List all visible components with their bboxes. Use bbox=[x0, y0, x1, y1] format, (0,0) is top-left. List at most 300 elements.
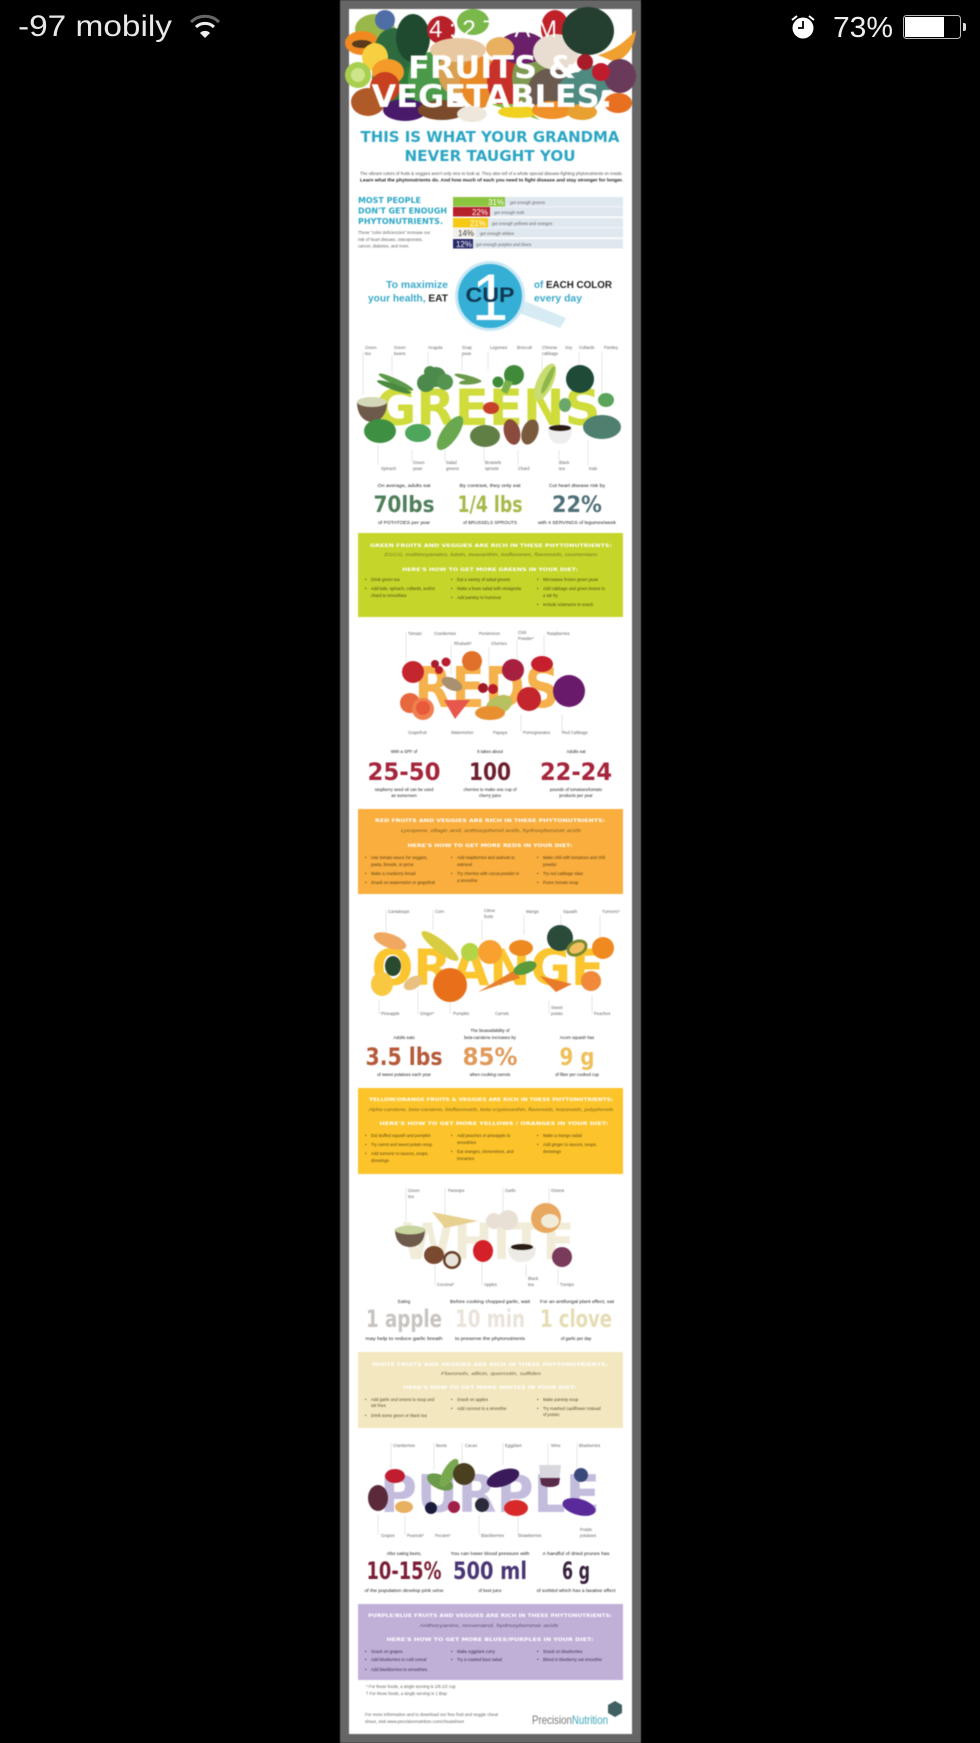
panel: orange illustration: Citrus bbox=[484, 908, 495, 913]
panel: purple tips: Snack on grapes bbox=[371, 1649, 402, 1654]
panel: greens illustration: peas bbox=[413, 466, 422, 471]
stats: purple: of sorbitol which has a laxative effect bbox=[536, 1588, 616, 1593]
stats: white: 1 apple bbox=[366, 1305, 442, 1333]
panel: reds tips: • bbox=[451, 855, 453, 860]
panel: reds tips: Make a cranberry bread bbox=[371, 871, 416, 876]
panel: white tips: of potato bbox=[543, 1412, 560, 1417]
panel: reds illustration: Cranberries bbox=[434, 631, 456, 636]
panel: white illustration: Turnips bbox=[560, 1282, 574, 1287]
panel: greens illustration: Black bbox=[559, 460, 570, 465]
stats: orange bbox=[366, 1028, 599, 1077]
panel: purple tips bbox=[358, 1604, 623, 1680]
stats: orange: when cooking carrots bbox=[470, 1072, 510, 1077]
panel: reds tips: Try red cabbage slaw bbox=[543, 871, 584, 876]
bar chart: color intake: get enough purples and blues bbox=[476, 242, 531, 247]
word: orange: ORANGE bbox=[372, 939, 604, 997]
bar chart: color intake: get enough whites bbox=[480, 231, 514, 236]
panel: orange tips: Eat stuffed squash and pumpkin bbox=[371, 1133, 431, 1138]
stats: purple: 6 g bbox=[562, 1557, 590, 1585]
panel: orange tips: Add ginger to sauces, soups, bbox=[543, 1142, 597, 1147]
stats: white: may help to reduce garlic breath bbox=[366, 1336, 443, 1341]
panel: white tips: • bbox=[365, 1413, 367, 1418]
word: greens: GREENS bbox=[376, 379, 600, 437]
panel: purple tips: • bbox=[365, 1649, 367, 1654]
panel: reds tips: • bbox=[365, 871, 367, 876]
icon: battery bbox=[904, 16, 966, 38]
panel: purple illustration: potatoes bbox=[580, 1533, 596, 1538]
panel: orange tips: • bbox=[537, 1133, 539, 1138]
panel: reds tips: Add raspberries and walnuts to bbox=[457, 855, 515, 860]
panel: purple illustration bbox=[368, 1443, 600, 1538]
panel: greens tips: Drink green tea bbox=[371, 577, 400, 582]
panel: white illustration: Green bbox=[408, 1188, 420, 1193]
stats: reds: It takes about bbox=[477, 749, 504, 754]
panel: orange illustration bbox=[371, 908, 620, 1016]
panel: reds illustration: Powder* bbox=[518, 636, 534, 641]
stats: reds: pounds of tomatoes/tomato bbox=[550, 787, 603, 792]
panel: purple tips: Add blackberries to smoothies bbox=[371, 1667, 427, 1672]
icon: alarm clock bbox=[792, 16, 814, 38]
panel: reds tips: • bbox=[537, 855, 539, 860]
panel: white tips: • bbox=[451, 1397, 453, 1402]
stats: white: to preserve the phytonutrients bbox=[455, 1336, 525, 1341]
panel: most people heading bbox=[358, 196, 447, 248]
intro text bbox=[360, 171, 623, 182]
panel: greens illustration: Spinach bbox=[381, 466, 397, 471]
panel: greens tips bbox=[358, 533, 623, 617]
panel: greens illustration: sprouts bbox=[485, 466, 499, 471]
panel: greens illustration: greens bbox=[446, 466, 459, 471]
panel: orange tips: • bbox=[365, 1151, 367, 1156]
stats: greens: with 4 SERVINGS of legumes/week bbox=[538, 520, 617, 525]
panel: white illustration: Parsnips bbox=[448, 1188, 464, 1193]
panel: greens illustration: tea bbox=[365, 351, 371, 356]
panel: orange illustration: Sweet bbox=[551, 1005, 563, 1010]
panel: white tips: Drink some green or black tea bbox=[371, 1413, 428, 1418]
panel: reds tips: Lycopene, ellagic acid, anthoxyphenol acids, hydroxybenzoic acids bbox=[401, 828, 582, 833]
stats: orange: The bioavailability of bbox=[471, 1028, 510, 1033]
panel: reds illustration: Papaya bbox=[493, 730, 508, 735]
intro text: The vibrant colors of fruits & veggies aren't only nice to look at. They also tell of a whole special disease-fighting phytonutrients on inside. bbox=[360, 171, 623, 176]
bar chart: color intake: 14% bbox=[458, 229, 474, 238]
panel: orange illustration: Turmeric* bbox=[602, 909, 620, 914]
stats: reds: 22-24 bbox=[540, 758, 612, 786]
panel: white tips: • bbox=[537, 1406, 539, 1411]
panel: greens tips: • bbox=[451, 595, 453, 600]
panel: orange illustration: Cantaloupe bbox=[388, 909, 410, 914]
panel: greens tips: a stir fry bbox=[543, 593, 559, 598]
logo: Precision Nutrition: PrecisionNutrition bbox=[532, 1713, 608, 1727]
status bar bbox=[18, 10, 966, 44]
callout: 1 cup per day: To maximize bbox=[386, 279, 448, 291]
panel: reds tips: • bbox=[365, 880, 367, 885]
panel: greens tips: HERE'S HOW TO GET MORE GREENS IN YOUR DIET: bbox=[402, 567, 578, 573]
panel: purple illustration: Wine bbox=[551, 1443, 561, 1448]
panel: white illustration: tea bbox=[408, 1194, 414, 1199]
stats: purple bbox=[364, 1551, 616, 1593]
title bbox=[372, 50, 612, 115]
stats: greens: of BRUSSELS SPROUTS bbox=[463, 520, 517, 525]
panel: orange illustration: Squash bbox=[563, 909, 578, 914]
stats: reds: raspberry seed oil can be used bbox=[375, 787, 434, 792]
panel: purple tips: • bbox=[451, 1649, 453, 1654]
intro text: Learn what the phytonutrients do. And how much of each you need to fight disease and stay stronger for longer. bbox=[360, 178, 623, 182]
logo: Precision Nutrition bbox=[532, 1701, 622, 1727]
panel: purple tips: • bbox=[537, 1657, 539, 1662]
panel: greens illustration: Collards bbox=[579, 345, 594, 350]
panel: orange tips: • bbox=[365, 1142, 367, 1147]
bar chart: color intake bbox=[453, 197, 623, 249]
panel: white illustration bbox=[395, 1188, 574, 1287]
produce shapes bbox=[368, 1456, 597, 1519]
stats: orange: beta-carotene increases by bbox=[464, 1035, 517, 1040]
panel: greens illustration: Broccoli bbox=[517, 345, 532, 350]
panel: greens illustration: Snap bbox=[462, 345, 472, 350]
panel: orange illustration: fruits bbox=[484, 914, 493, 919]
panel: reds illustration: Watermelon bbox=[451, 730, 474, 735]
bar chart: color intake: 31% bbox=[488, 198, 504, 207]
header collage of fruits and vegetables bbox=[345, 7, 636, 122]
panel: purple tips: • bbox=[537, 1649, 539, 1654]
panel: orange tips: • bbox=[365, 1133, 367, 1138]
stats: reds: With a SPF of bbox=[391, 749, 418, 754]
bar chart: color intake: get enough greens bbox=[510, 200, 545, 205]
stats: reds: 25-50 bbox=[368, 758, 440, 786]
panel: white illustration: Coconut* bbox=[437, 1282, 455, 1287]
panel: orange illustration: Ginger* bbox=[420, 1011, 435, 1016]
panel: white tips: • bbox=[451, 1406, 453, 1411]
panel: greens tips: • bbox=[537, 586, 539, 591]
footnotes: † For these foods, a single serving is 1 tbsp bbox=[366, 1691, 447, 1696]
stats: reds: cherries to make one cup of bbox=[463, 787, 517, 792]
panel: purple tips: Try a roasted beet salad bbox=[457, 1657, 503, 1662]
stats: orange: 3.5 lbs bbox=[366, 1043, 442, 1071]
stats: reds: 100 bbox=[469, 758, 511, 786]
panel: greens illustration: Green bbox=[394, 345, 406, 350]
stats: reds: as sunscreen bbox=[391, 793, 417, 798]
panel: purple tips: • bbox=[451, 1657, 453, 1662]
panel: purple illustration: Blackberries bbox=[481, 1533, 504, 1538]
panel: reds illustration: Persimmon bbox=[479, 631, 501, 636]
panel: purple tips: Add blueberries to cold cereal bbox=[371, 1657, 426, 1662]
panel: orange tips: Add turmeric to sauces, soups, bbox=[371, 1151, 428, 1156]
panel: reds illustration bbox=[400, 630, 589, 735]
word: purple: PURPLE bbox=[380, 1465, 600, 1525]
panel: orange tips: Try carrot and sweet potato soup bbox=[371, 1142, 433, 1147]
stats: white: 1 clove bbox=[540, 1305, 612, 1333]
panel: white tips: Snack on apples bbox=[457, 1397, 488, 1402]
panel: reds illustration: Raspberries bbox=[547, 631, 570, 636]
panel: greens illustration: tea bbox=[559, 466, 565, 471]
panel: white illustration: Garlic bbox=[505, 1188, 516, 1193]
panel: orange tips: YELLOW/ORANGE FRUITS & VEGGIES ARE RICH IN THESE PHYTONUTRIENTS: bbox=[368, 1097, 613, 1103]
panel: orange tips: Alpha-carotene, beta-carotene, bioflavonoids, beta-cryptoxanthin, flavonoids, terpenoids, polyphenols bbox=[367, 1107, 614, 1112]
stats: purple: of beet juice bbox=[478, 1588, 502, 1593]
stats: reds: Adults eat bbox=[566, 749, 586, 754]
panel: reds tips: powder bbox=[543, 862, 557, 867]
panel: reds tips: • bbox=[451, 871, 453, 876]
panel: white illustration: Apples bbox=[484, 1282, 497, 1287]
stats: purple: A handful of dried prunes has bbox=[542, 1551, 610, 1556]
panel: orange tips: Add peaches or pineapple to bbox=[457, 1133, 511, 1138]
panel: reds illustration: Cherries bbox=[491, 641, 507, 646]
stats: greens: 1/4 lbs bbox=[458, 493, 522, 518]
word: white: WHITE bbox=[402, 1213, 574, 1271]
callout: 1 cup per day: your health, EAT bbox=[368, 292, 449, 304]
panel: reds tips: Try cherries with cocoa powder in bbox=[457, 871, 520, 876]
panel: purple illustration: Eggplant bbox=[505, 1443, 522, 1448]
icon: measuring cup bbox=[455, 260, 566, 334]
panel: reds tips: • bbox=[537, 871, 539, 876]
panel: orange tips: Make a mango salad bbox=[543, 1133, 583, 1138]
panel: orange illustration: Mango bbox=[526, 909, 539, 914]
carrier text: -97 mobily bbox=[18, 10, 172, 43]
subtitle bbox=[360, 128, 620, 165]
produce shapes bbox=[395, 1203, 572, 1269]
panel: most people heading: These "color deficiencies" increase our bbox=[358, 230, 431, 235]
panel: greens illustration: Arugula bbox=[428, 345, 443, 350]
stats: greens: 70lbs bbox=[374, 493, 434, 518]
panel: white tips: WHITE FRUITS AND VEGGIES ARE RICH IN THESE PHYTONUTRIENTS: bbox=[372, 1362, 608, 1368]
stats: white bbox=[366, 1299, 615, 1341]
panel: greens tips: • bbox=[537, 577, 539, 582]
panel: greens tips: EGCG, isothiocyanates, lutein, zeaxanthin, isoflavones, flavonoids, coumestans bbox=[384, 552, 598, 557]
panel: purple tips: Anthocyanins, resveratrol, hydroxybenzoic acids bbox=[418, 1623, 559, 1628]
stats: purple: You can lower blood pressure with bbox=[450, 1551, 530, 1556]
subtitle: THIS IS WHAT YOUR GRANDMA bbox=[360, 128, 620, 146]
panel: white tips: HERE'S HOW TO GET MORE WHITES IN YOUR DIET: bbox=[404, 1385, 577, 1391]
stats: greens: 22% bbox=[552, 493, 602, 518]
panel: white tips: Try mashed cauliflower instead bbox=[543, 1406, 601, 1411]
panel: orange tips: dressings bbox=[371, 1158, 389, 1163]
panel: greens tips: • bbox=[451, 586, 453, 591]
bar chart: color intake: get enough reds bbox=[494, 210, 524, 215]
panel: orange illustration: Pumpkin bbox=[453, 1011, 470, 1016]
panel: greens tips: Add cabbage and green beans to bbox=[543, 586, 606, 591]
battery percent: 73% bbox=[833, 12, 893, 44]
panel: reds tips: HERE'S HOW TO GET MORE REDS IN YOUR DIET: bbox=[408, 843, 573, 849]
panel: greens illustration: Salad bbox=[446, 460, 457, 465]
panel: greens tips: Eat a variety of salad greens bbox=[457, 577, 510, 582]
panel: reds illustration: Pomegranates bbox=[523, 730, 550, 735]
panel: reds tips: pasta, breads, or pizza bbox=[371, 862, 414, 867]
panel: greens tips: GREEN FRUITS AND VEGGIES ARE RICH IN THESE PHYTONUTRIENTS: bbox=[370, 543, 612, 549]
panel: reds tips: Use tomato sauce for veggies, bbox=[371, 855, 428, 860]
panel: white tips: Add garlic and onions to soup and bbox=[371, 1397, 435, 1402]
panel: greens illustration bbox=[357, 345, 621, 471]
panel: most people heading: cancer, diabetes, and more. bbox=[358, 244, 410, 248]
panel: greens illustration: Brussels bbox=[485, 460, 501, 465]
panel: greens tips: Make a bean salad with vinaigrette bbox=[457, 586, 522, 591]
stats: greens: By contrast, they only eat bbox=[460, 483, 522, 488]
icon: measuring cup: 1 bbox=[472, 260, 508, 334]
stats: white: Eating bbox=[398, 1299, 411, 1304]
stats: white: For an antifungal plant effect, eat bbox=[540, 1299, 615, 1304]
stats: orange: Acorn squash has bbox=[560, 1035, 594, 1040]
panel: orange illustration: Pineapple bbox=[381, 1011, 400, 1016]
panel: orange illustration: potato bbox=[551, 1011, 563, 1016]
stats: purple: 500 ml bbox=[453, 1557, 527, 1585]
stats: orange: of sweet potatoes each year bbox=[377, 1072, 431, 1077]
panel: purple tips: Make eggplant curry bbox=[457, 1649, 496, 1654]
panel: greens illustration: Legumes bbox=[490, 345, 507, 350]
panel: greens tips: Include edamame to snack bbox=[543, 602, 594, 607]
panel: purple tips: HERE'S HOW TO GET MORE BLUES/PURPLES IN YOUR DIET: bbox=[386, 1637, 594, 1643]
panel: purple illustration: Blueberries bbox=[579, 1443, 600, 1448]
panel: white tips: Make parsnip soup bbox=[543, 1397, 579, 1402]
panel: white tips: • bbox=[365, 1397, 367, 1402]
produce shapes bbox=[371, 925, 614, 1002]
stats: reds: cherry juice bbox=[479, 793, 502, 798]
panel: orange tips bbox=[358, 1088, 623, 1174]
panel: greens tips: chard to smoothies bbox=[371, 593, 406, 598]
panel: reds tips: a smoothie bbox=[457, 878, 478, 883]
panel: purple illustration: Peanuts* bbox=[407, 1533, 424, 1538]
panel: orange tips: • bbox=[537, 1142, 539, 1147]
panel: reds tips: Make chili with tomatoes and chili bbox=[543, 855, 605, 860]
panel: reds tips: RED FRUITS AND VEGGIES ARE RICH IN THESE PHYTONUTRIENTS: bbox=[375, 818, 605, 824]
panel: greens illustration: Kale bbox=[589, 466, 598, 471]
panel: reds tips: Snack on watermelon or grapefruit bbox=[371, 880, 436, 885]
overlaid time text: 4:27 AM bbox=[429, 16, 557, 43]
panel: greens illustration: Chinese bbox=[542, 345, 558, 350]
panel: white illustration: tea bbox=[528, 1282, 534, 1287]
panel: reds tips: oatmeal bbox=[457, 862, 472, 867]
stats: orange: of fiber per cooked cup bbox=[555, 1072, 599, 1077]
stats: white: 10 min bbox=[455, 1305, 525, 1333]
panel: purple illustration: Cranberries bbox=[393, 1443, 415, 1448]
panel: white tips bbox=[358, 1352, 623, 1428]
panel: orange illustration: Corn bbox=[435, 909, 445, 914]
panel: reds tips: Puree tomato soup bbox=[543, 880, 579, 885]
panel: greens tips: • bbox=[365, 586, 367, 591]
panel: greens illustration: Parsley bbox=[604, 345, 619, 350]
title: FRUITS & bbox=[408, 50, 576, 86]
panel: reds illustration: Chili bbox=[518, 630, 526, 635]
stats: orange: 9 g bbox=[560, 1043, 594, 1071]
panel: purple tips: PURPLE/BLUE FRUITS AND VEGGIES ARE RICH IN THESE PHYTONUTRIENTS: bbox=[368, 1613, 612, 1619]
stats: reds: products per year bbox=[559, 793, 593, 798]
panel: purple tips: Snack on blueberries bbox=[543, 1649, 582, 1654]
bar chart: color intake: get enough yellows and oranges bbox=[492, 221, 552, 226]
panel: greens illustration: cabbage bbox=[542, 351, 559, 356]
panel: orange illustration: Carrots bbox=[495, 1011, 509, 1016]
panel: purple illustration: Pecans* bbox=[435, 1533, 451, 1538]
panel: white tips: Add coconut to a smoothie bbox=[457, 1406, 507, 1411]
stats: greens: On average, adults eat bbox=[378, 483, 431, 488]
callout: 1 cup per day: of EACH COLOR bbox=[534, 279, 612, 291]
panel: reds tips: • bbox=[365, 855, 367, 860]
stats: white: Before cooking chopped garlic, wait bbox=[450, 1299, 531, 1304]
panel: white tips: Flavonols, allicin, quercetin, sulfides bbox=[441, 1371, 542, 1376]
stats: purple: 10-15% bbox=[366, 1557, 442, 1585]
fruit shapes bbox=[400, 651, 585, 720]
panel: purple tips: • bbox=[365, 1667, 367, 1672]
panel: greens tips: • bbox=[451, 577, 453, 582]
subtitle: NEVER TAUGHT YOU bbox=[404, 147, 576, 165]
footnotes bbox=[366, 1684, 456, 1696]
footer text: sheet, visit www.precisionnutrition.com/cheatsheet bbox=[365, 1719, 465, 1724]
panel: reds tips bbox=[358, 809, 623, 894]
title: VEGETABLES: bbox=[372, 79, 612, 115]
panel: purple illustration: Beets bbox=[436, 1443, 447, 1448]
panel: orange tips: • bbox=[451, 1133, 453, 1138]
stats: purple: of the population develop pink urine bbox=[364, 1588, 444, 1593]
stats: purple: After eating beets, bbox=[387, 1551, 421, 1556]
bar chart: color intake: 22% bbox=[472, 208, 488, 217]
panel: white tips: • bbox=[537, 1397, 539, 1402]
panel: orange tips: • bbox=[451, 1149, 453, 1154]
panel: reds illustration: Rhubarb* bbox=[454, 641, 472, 646]
panel: greens illustration: peas bbox=[462, 351, 471, 356]
footnotes: * For these foods, a single serving is 1/8-1/2 cup bbox=[366, 1684, 456, 1689]
vegetable shapes bbox=[357, 360, 621, 454]
panel: white tips: stir fries bbox=[371, 1403, 386, 1408]
panel: greens tips: • bbox=[537, 602, 539, 607]
panel: most people heading: MOST PEOPLE bbox=[358, 196, 421, 205]
panel: purple illustration: Purple bbox=[580, 1527, 593, 1532]
panel: greens illustration: Chard bbox=[518, 466, 530, 471]
panel: reds illustration: Red Cabbage bbox=[562, 730, 589, 735]
panel: reds tips: • bbox=[537, 880, 539, 885]
panel: greens illustration: Soy bbox=[565, 345, 573, 350]
panel: greens illustration: Green bbox=[413, 460, 425, 465]
icon: wifi bbox=[191, 16, 219, 38]
panel: greens illustration: beans bbox=[394, 351, 405, 356]
bar chart: color intake: 21% bbox=[470, 219, 486, 228]
stats: orange: 85% bbox=[462, 1043, 518, 1071]
panel: purple tips: • bbox=[365, 1657, 367, 1662]
panel: purple illustration: Strawberries bbox=[518, 1533, 542, 1538]
panel: orange tips: HERE'S HOW TO GET MORE YELLOWS / ORANGES IN YOUR DIET: bbox=[380, 1121, 609, 1127]
panel: purple illustration: Grapes bbox=[381, 1533, 395, 1538]
panel: white illustration: Black bbox=[528, 1276, 539, 1281]
panel: most people heading: risk of heart disease, osteoporosis, bbox=[358, 237, 423, 242]
panel: reds illustration: Grapefruit bbox=[408, 730, 427, 735]
callout: 1 cup per day: every day bbox=[534, 292, 582, 304]
footer text: For more information and to download our free fruit and veggie cheat bbox=[365, 1712, 499, 1717]
panel: most people heading: DON'T GET ENOUGH bbox=[358, 206, 447, 216]
panel: most people heading: PHYTONUTRIENTS. bbox=[358, 217, 443, 226]
callout: 1 cup per day bbox=[368, 260, 612, 334]
white page bbox=[349, 9, 632, 1734]
stats: orange: Adults eats bbox=[393, 1035, 415, 1040]
word: reds: REDS bbox=[414, 656, 560, 721]
panel: greens tips: Microwave frozen green peas bbox=[543, 577, 598, 582]
panel: greens tips: • bbox=[365, 577, 367, 582]
icon: measuring cup: CUP bbox=[466, 284, 514, 307]
panel: orange tips: tomatoes bbox=[457, 1156, 474, 1161]
panel: purple illustration: Cacao bbox=[465, 1443, 478, 1448]
stats: greens: Cut heart disease risk by bbox=[549, 483, 606, 488]
panel: purple tips: Blend in blueberry oat smoothie bbox=[543, 1657, 603, 1662]
panel: reds illustration: Tomato bbox=[408, 631, 422, 636]
panel: greens tips: Add kale, spinach, collards, and/or bbox=[371, 586, 436, 591]
panel: white illustration: Onions bbox=[551, 1188, 564, 1193]
stats: white: of garlic per day bbox=[561, 1336, 592, 1341]
panel: orange tips: Eat oranges, clementines, and bbox=[457, 1149, 514, 1154]
panel: orange tips: smoothies bbox=[457, 1140, 476, 1145]
panel: orange illustration: Peaches bbox=[594, 1011, 610, 1016]
stats: greens: of POTATOES per year bbox=[378, 520, 431, 525]
bar chart: color intake: 12% bbox=[456, 240, 472, 249]
panel: orange tips: dressings bbox=[543, 1149, 561, 1154]
panel: greens illustration: Green bbox=[365, 345, 377, 350]
stats: reds bbox=[368, 749, 612, 798]
stats: greens bbox=[374, 483, 617, 525]
footer text bbox=[365, 1712, 499, 1724]
panel: greens tips: Add parsley to hummus bbox=[457, 595, 501, 600]
